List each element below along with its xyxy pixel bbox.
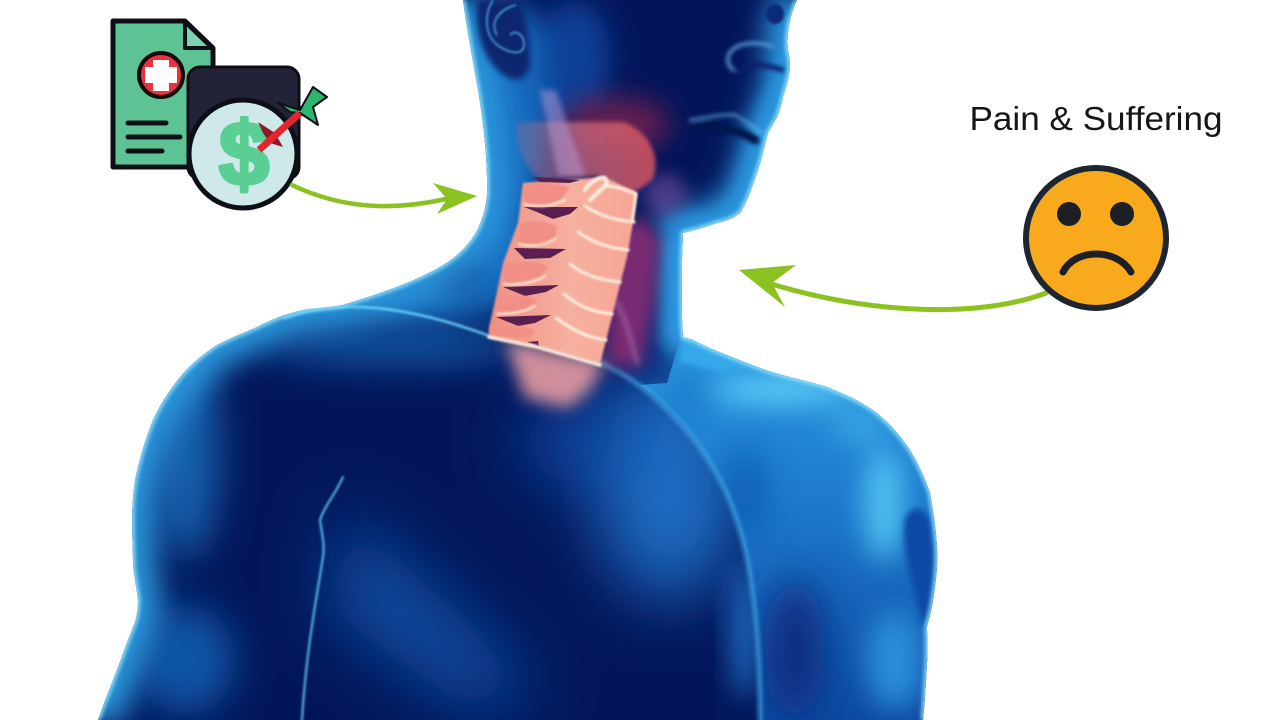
cervical spine (489, 177, 637, 365)
face light (656, 24, 790, 234)
neck side (646, 234, 683, 368)
facial features (690, 43, 782, 140)
icon: dollar coin: $ (219, 105, 269, 205)
icon: dollar coin (189, 100, 297, 208)
icon: dark wallet (188, 67, 299, 179)
rim light (98, 0, 937, 720)
heading: pain and suffering: Pain & Suffering (970, 100, 1222, 137)
arrow: medical costs to neck (292, 183, 477, 214)
spine vertebrae side processes (490, 183, 570, 338)
ear (477, 0, 530, 79)
armpit shadow (904, 509, 934, 625)
spine pale edge lines (489, 178, 636, 365)
medical bill and money icon (113, 21, 327, 208)
back of head and neck (355, 0, 610, 320)
chest line inner lightness (731, 560, 759, 700)
icon: red cross badge (139, 53, 183, 97)
arrow: pain to neck (739, 265, 1046, 310)
edge inner glow (98, 0, 937, 720)
throat and spine glow (505, 90, 687, 408)
icon: dart (258, 87, 327, 150)
eye (766, 4, 784, 24)
icon: sad face (1026, 168, 1166, 308)
neck outer trapezius (680, 337, 751, 372)
human torso and head illustration (98, 0, 945, 720)
icon: medical document (113, 21, 213, 167)
spine vertebral column (489, 177, 637, 364)
spine dark disc gaps (496, 177, 580, 346)
left arm and chest shading (135, 329, 525, 715)
collarbone and body lines (285, 307, 760, 720)
right chest and shoulder (640, 330, 938, 720)
